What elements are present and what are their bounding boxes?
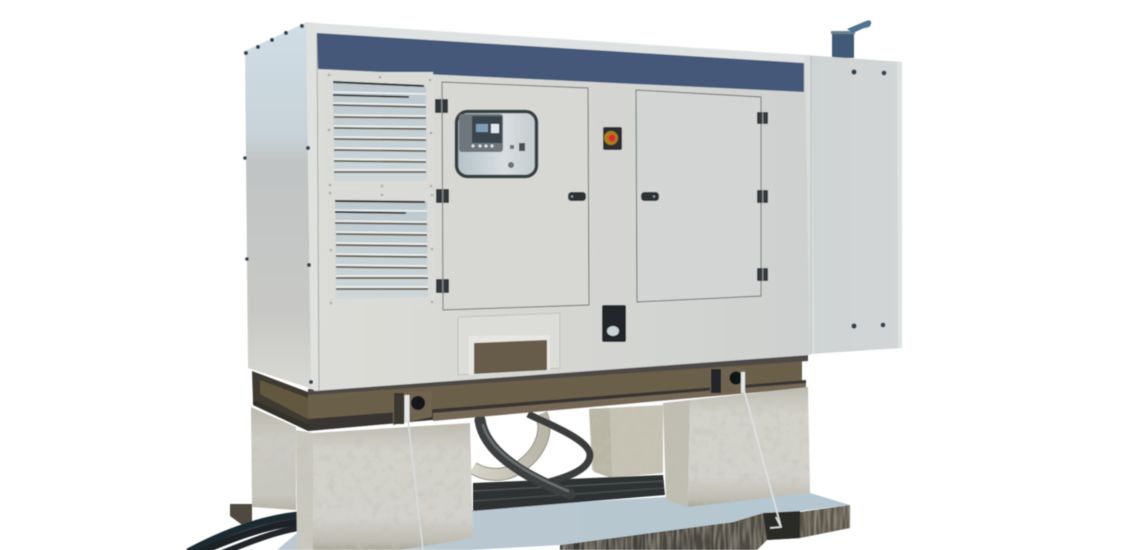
end panel on the right [805,55,902,354]
front left concrete block [296,423,473,550]
exhaust pipe with flap [831,20,871,58]
white tie cord left [407,395,423,550]
concrete slab [230,493,850,550]
left side panel [243,22,319,391]
steel base frame [252,355,808,431]
blue band [317,33,804,92]
cable bundle under generator [473,475,665,511]
lower access panel with plate [458,313,560,375]
white tie cord right [743,372,781,528]
mounting bracket left [393,391,432,425]
upper louver vent [327,72,433,187]
lower latch opening [602,305,626,342]
front right concrete block [663,387,810,507]
dark looped hose [528,414,590,483]
lower louver vent [328,190,434,305]
thick hose [480,420,570,494]
emergency stop button [603,127,622,150]
mounting bracket right [710,367,745,394]
pale ring hose [473,414,544,474]
foreground hoses at lower left [188,515,298,550]
control panel window [456,112,536,176]
back concrete blocks [251,405,663,510]
main enclosure front [313,23,810,391]
right door [636,90,761,302]
door handles [568,192,659,201]
left door [442,82,589,310]
door hinges [435,99,768,293]
